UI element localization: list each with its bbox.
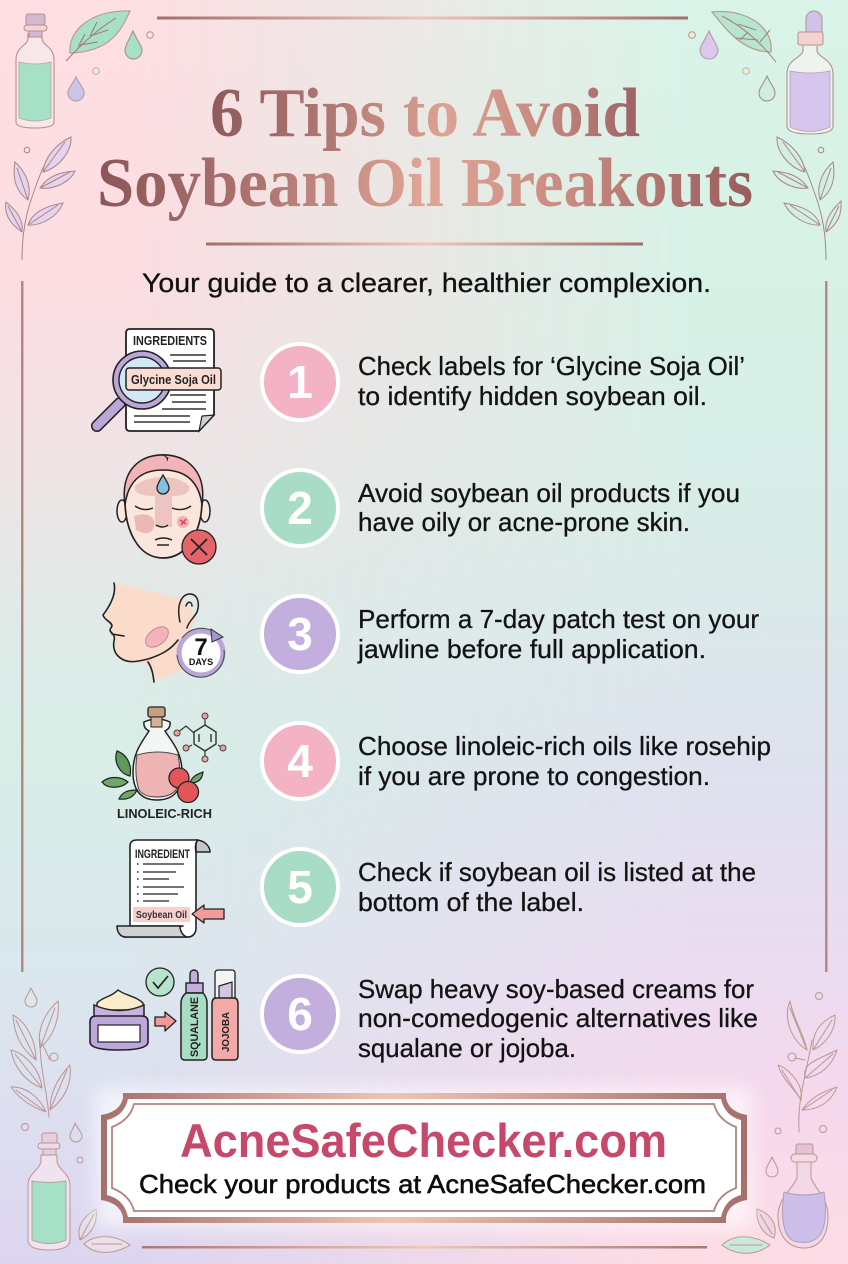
tip text 6: Swap heavy soy-based creams for xyxy=(358,974,754,1004)
number badge 2 xyxy=(262,470,338,546)
title: 6 Tips to Avoid xyxy=(210,75,640,152)
tip text 4 xyxy=(358,731,771,791)
footer website name: AcneSafeChecker.com xyxy=(180,1114,667,1167)
number badge 3: 3 xyxy=(287,608,313,660)
decoration: bottom-right sprig and bottle xyxy=(722,992,837,1253)
tip text 6 xyxy=(358,974,758,1063)
icon: cream jar swapped for squalane and jojoba xyxy=(90,968,238,1060)
decoration: top-left bottle xyxy=(16,14,54,128)
icon: ingredient label under magnifier: Glycine Soja Oil xyxy=(131,372,216,387)
icon: ingredient scroll with arrow: Soybean Oil xyxy=(136,909,187,921)
number badge 1 xyxy=(262,344,338,420)
step 4 xyxy=(102,707,771,821)
tip text 3: Perform a 7-day patch test on your xyxy=(358,604,759,634)
icon: cream jar swapped for squalane and jojoba: SQUALANE xyxy=(189,997,201,1057)
number badge 6 xyxy=(262,976,338,1052)
decoration: top-left leaf and drops xyxy=(66,11,153,101)
number badge 4 xyxy=(262,723,338,799)
tip text 5: bottom of the label. xyxy=(358,887,584,917)
icon: ingredient scroll with arrow xyxy=(117,840,224,937)
title: Soybean Oil Breakouts xyxy=(97,145,753,222)
step 3 xyxy=(103,583,759,682)
icon: cream jar swapped for squalane and jojoba: JOJOBA xyxy=(220,1012,232,1052)
step 5 xyxy=(117,840,756,937)
tip text 1 xyxy=(358,351,745,411)
step 6 xyxy=(90,968,758,1063)
icon: ingredient scroll with arrow: INGREDIENT xyxy=(135,849,190,861)
tip text 5: Check if soybean oil is listed at the xyxy=(358,857,756,887)
step 1 xyxy=(97,329,745,431)
decoration: top-left sprig xyxy=(6,137,75,260)
tip text 2: Avoid soybean oil products if you xyxy=(358,478,740,508)
step 2 xyxy=(117,455,740,564)
number badge 5 xyxy=(262,849,338,925)
icon: rosehip oil bottle and molecule xyxy=(102,707,226,821)
tip text 3 xyxy=(357,604,759,664)
footer banner xyxy=(96,1088,752,1228)
decoration: top-right bottle xyxy=(787,11,833,134)
number badge 3 xyxy=(262,596,338,672)
icon: jawline patch test with 7 days timer xyxy=(103,583,224,682)
tip text 2: have oily or acne-prone skin. xyxy=(358,507,690,537)
tip text 4: if you are prone to congestion. xyxy=(358,761,710,791)
icon: jawline patch test with 7 days timer: 7 xyxy=(194,634,208,661)
title xyxy=(97,75,753,222)
icon: jawline patch test with 7 days timer: DAYS xyxy=(189,657,213,667)
decoration: top-right leaf and drops xyxy=(689,11,776,101)
number badge 5: 5 xyxy=(287,861,313,913)
number badge 2: 2 xyxy=(287,482,313,534)
tip text 3: jawline before full application. xyxy=(357,634,706,664)
icon: face with breakout and cross xyxy=(117,455,216,564)
tip text 1: to identify hidden soybean oil. xyxy=(358,381,707,411)
tip text 6: non-comedogenic alternatives like xyxy=(358,1003,758,1033)
number badge 1: 1 xyxy=(287,356,313,408)
decoration: bottom-left sprig and bottle xyxy=(11,988,130,1252)
decoration: top-right sprig xyxy=(773,137,841,260)
tip text 2 xyxy=(358,478,740,537)
footer call to action: Check your products at AcneSafeChecker.com xyxy=(139,1169,706,1199)
tip text 1: Check labels for ‘Glycine Soja Oil’ xyxy=(358,351,745,381)
icon: rosehip oil bottle and molecule: LINOLEIC-RICH xyxy=(117,807,212,821)
tip text 5 xyxy=(358,857,756,917)
subtitle: Your guide to a clearer, healthier complexion. xyxy=(142,268,711,298)
icon: ingredient label under magnifier: INGREDIENTS xyxy=(133,334,207,348)
number badge 6: 6 xyxy=(287,988,313,1040)
tip text 6: squalane or jojoba. xyxy=(358,1033,576,1063)
tip text 4: Choose linoleic-rich oils like rosehip xyxy=(358,731,771,761)
icon: ingredient label under magnifier xyxy=(97,329,221,431)
number badge 4: 4 xyxy=(287,735,313,787)
